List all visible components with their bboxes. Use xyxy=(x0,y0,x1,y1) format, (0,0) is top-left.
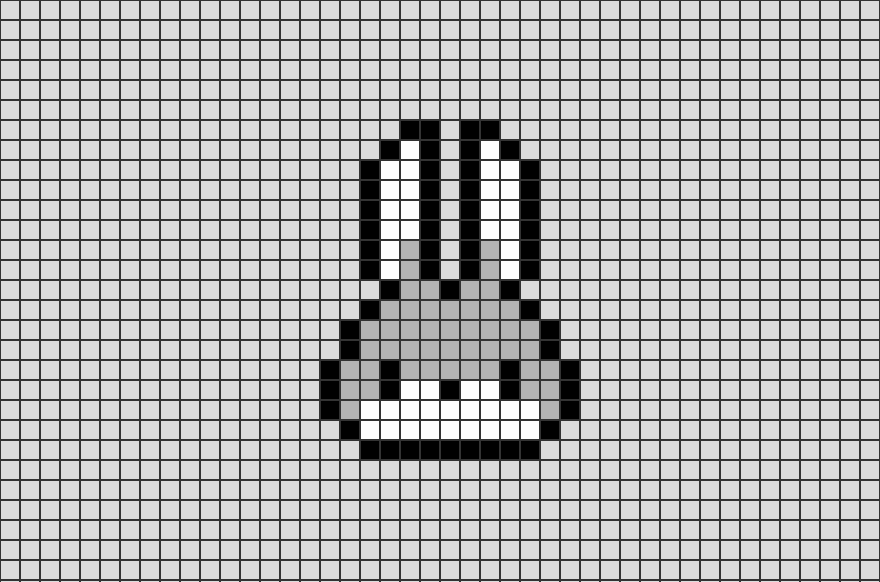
bunny white areas xyxy=(360,140,540,440)
bunny gray fur xyxy=(340,240,560,420)
bunny black outline xyxy=(320,120,580,460)
